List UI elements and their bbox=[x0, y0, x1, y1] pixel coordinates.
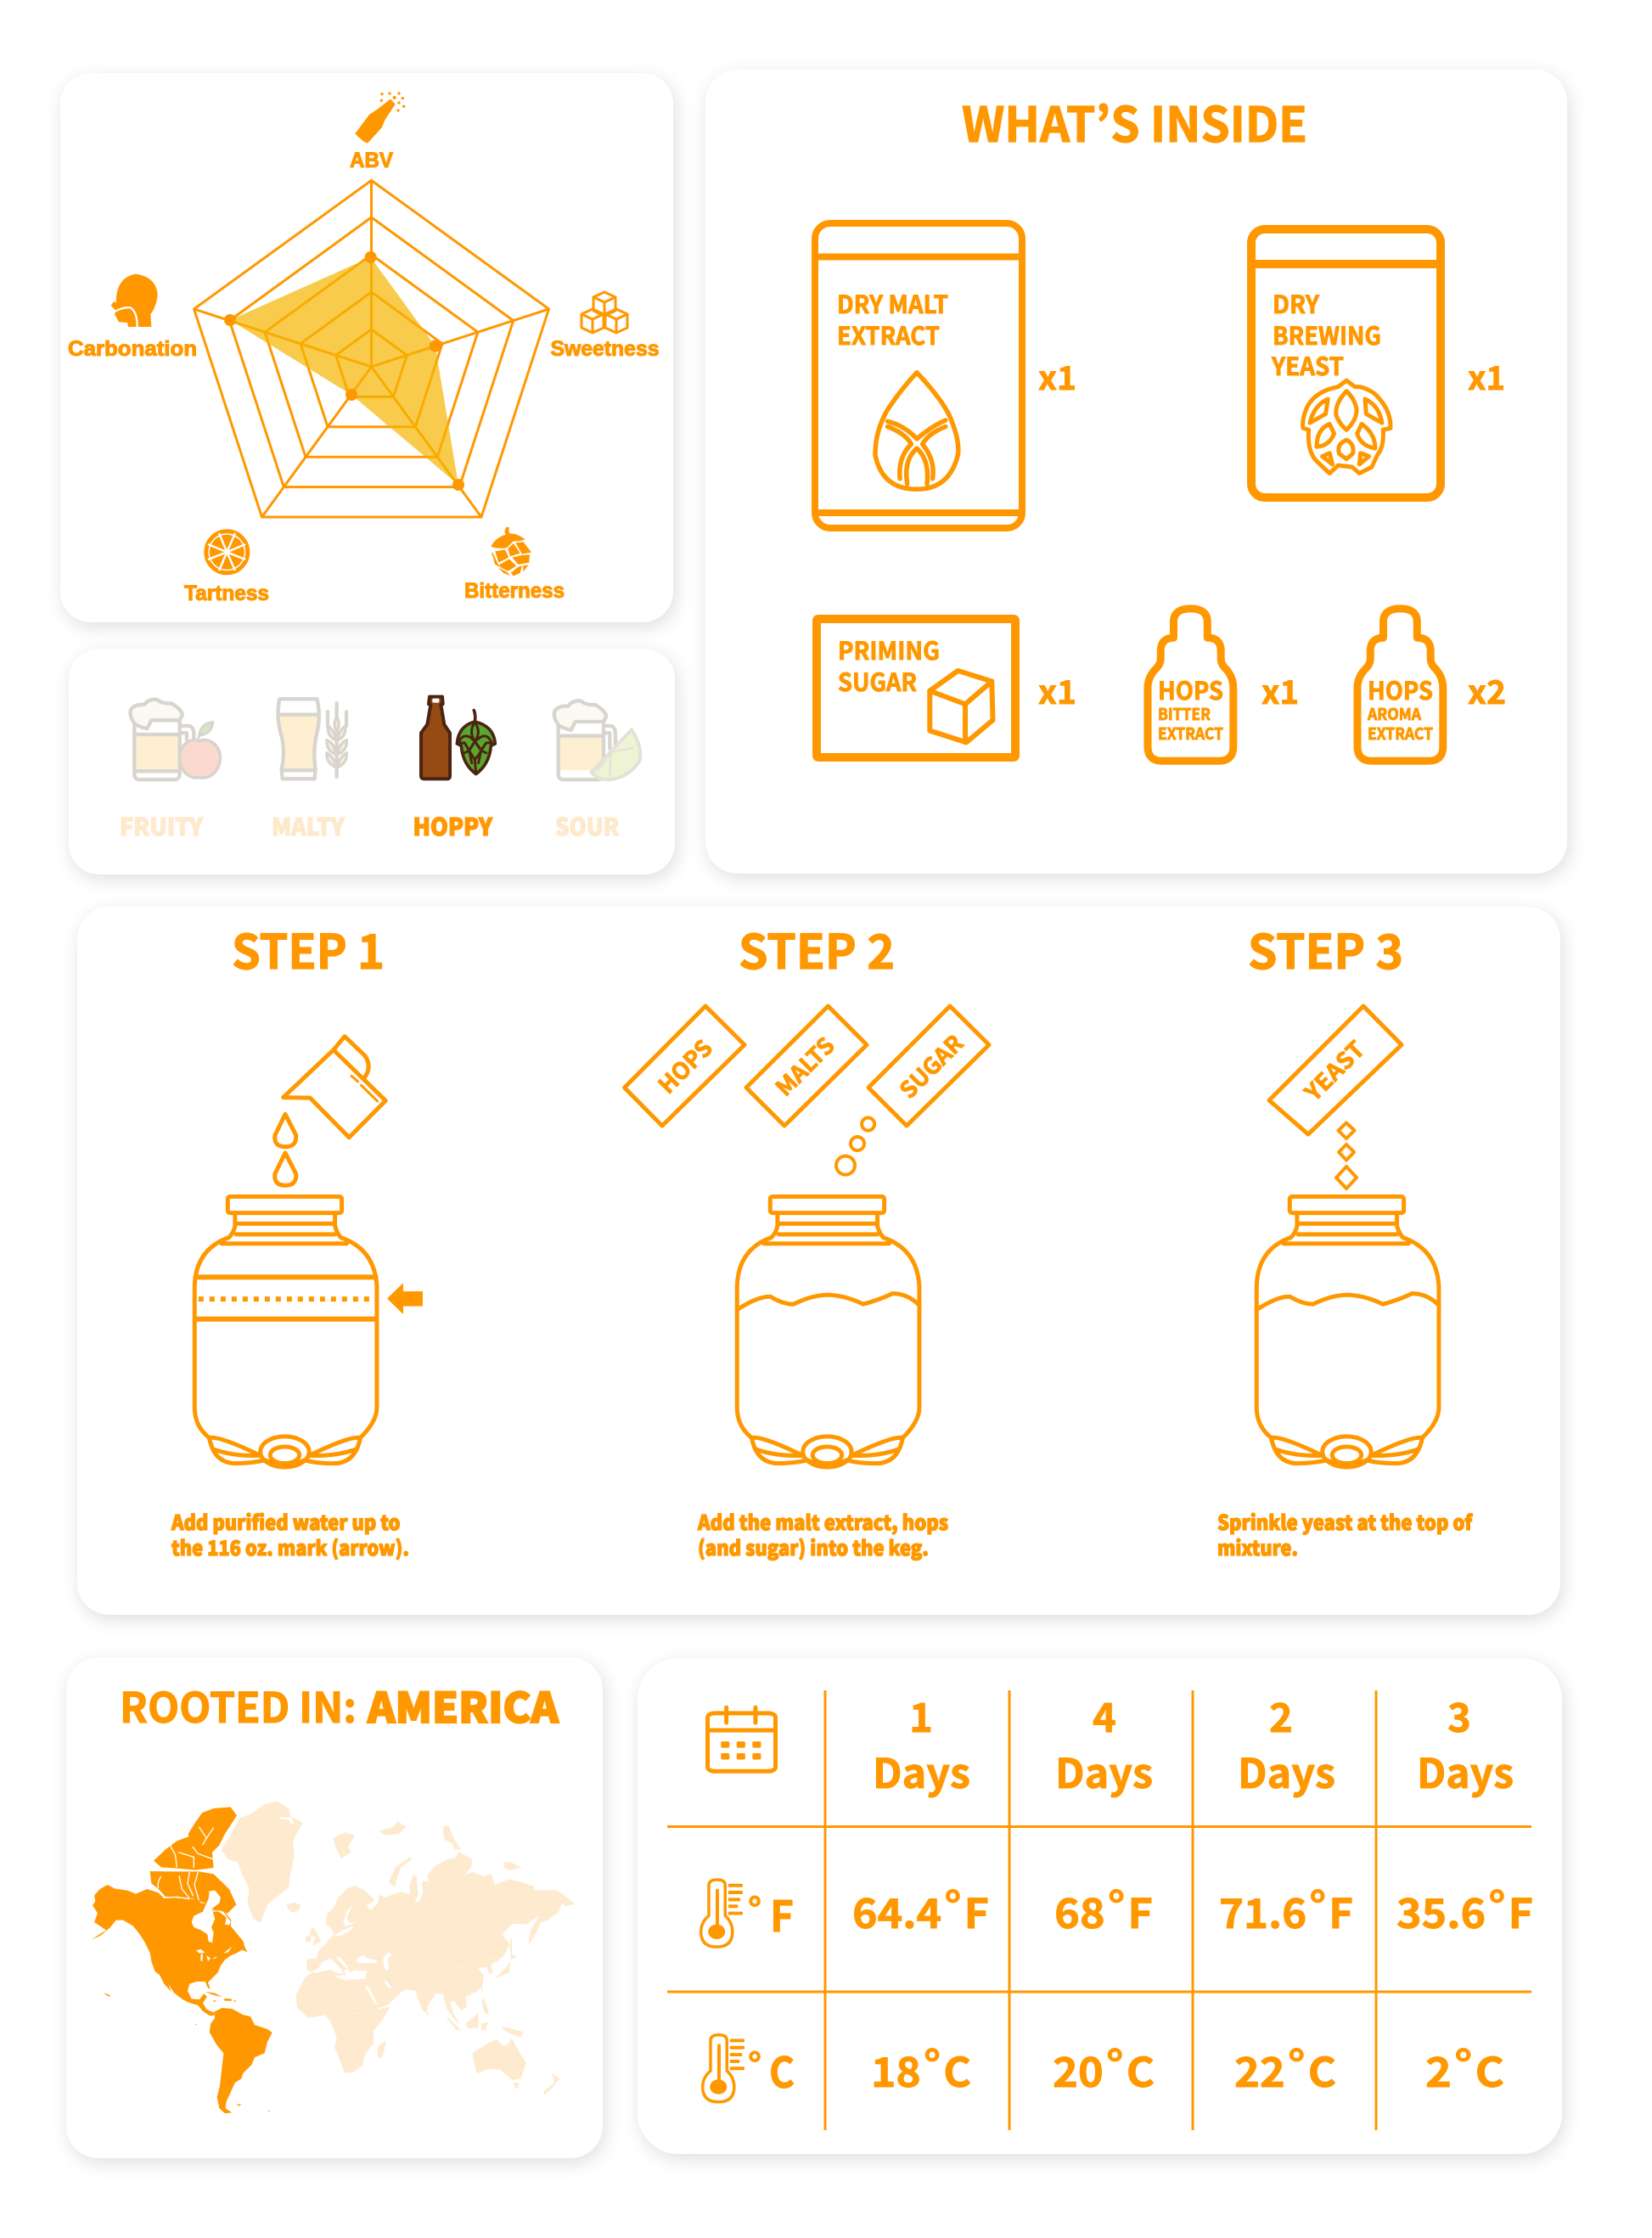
column 3 days: Days bbox=[1238, 1740, 1335, 1800]
icon: malty glass bbox=[278, 699, 346, 779]
label: Sweetness: Sweetness bbox=[550, 337, 659, 361]
panel: fermentation table bbox=[638, 1658, 1562, 2154]
icon: calendar bbox=[708, 1707, 776, 1771]
panel: what's inside bbox=[705, 70, 1567, 874]
bottle: hops bitter extract: BITTER bbox=[1158, 702, 1211, 725]
heading: step 1: STEP 1 bbox=[232, 914, 385, 983]
label: ABV: ABV bbox=[350, 149, 393, 172]
icon: hop cone bbox=[491, 527, 531, 576]
label: Bitterness: Bitterness bbox=[464, 579, 565, 603]
bottle: hops aroma extract: HOPS bbox=[1368, 672, 1433, 707]
bag: priming sugar: SUGAR bbox=[838, 663, 917, 699]
heading: step 2: STEP 2 bbox=[739, 914, 895, 983]
temp C column 2: 20 bbox=[1053, 2039, 1101, 2099]
keg: step 2 bbox=[737, 1196, 919, 1467]
temp F column 2: 68 bbox=[1054, 1881, 1103, 1940]
temp F column 1: F bbox=[964, 1881, 989, 1940]
row label: celsius bbox=[703, 2035, 795, 2102]
temp C column 1: 18 bbox=[871, 2039, 919, 2099]
heading: rooted in america: AMERICA bbox=[367, 1675, 559, 1735]
label: x1 sugar: x1 bbox=[1038, 666, 1076, 713]
column 2 days bbox=[1055, 1685, 1153, 1800]
keg: step 1 bbox=[194, 1196, 377, 1467]
panel: origin map bbox=[66, 1657, 603, 2158]
bag: dry malt extract: EXTRACT bbox=[837, 317, 940, 352]
label: HOPPY: HOPPY bbox=[413, 809, 493, 843]
icon: falling yeast bbox=[1336, 1122, 1357, 1189]
heading: rooted in america bbox=[120, 1675, 559, 1735]
label: Tartness: Tartness bbox=[184, 582, 269, 605]
icon: pitcher pouring bbox=[284, 1037, 385, 1138]
bag: dry brewing yeast: DRY bbox=[1273, 285, 1320, 321]
text: step 2 instructions: Add the malt extract, hops bbox=[697, 1506, 948, 1536]
temp C column 2: C bbox=[1127, 2039, 1155, 2099]
heading: step 3: STEP 3 bbox=[1248, 914, 1403, 983]
bottle: hops bitter extract: EXTRACT bbox=[1158, 722, 1223, 745]
temp F column 4: ° bbox=[1488, 1874, 1506, 1933]
icon: grain drop bbox=[875, 373, 958, 489]
row label: fahrenheit: ° bbox=[748, 1883, 761, 1932]
bottle: hops aroma extract: EXTRACT bbox=[1368, 722, 1433, 745]
text: step 3 instructions: mixture. bbox=[1217, 1532, 1298, 1561]
temp C column 2: ° bbox=[1106, 2033, 1124, 2092]
packet: yeast bbox=[1269, 1006, 1402, 1134]
icon: orange slice bbox=[206, 531, 248, 573]
icon: falling bubbles bbox=[836, 1117, 874, 1175]
text: step 3 instructions: Sprinkle yeast at the top of bbox=[1217, 1506, 1473, 1536]
row label: celsius: ° bbox=[748, 2038, 761, 2088]
arrow: water level bbox=[387, 1283, 423, 1314]
packet: hops bbox=[625, 1006, 745, 1126]
bottle: hops aroma extract bbox=[1357, 609, 1443, 761]
label: x2 aroma: x2 bbox=[1468, 666, 1506, 713]
temp F column 2: F bbox=[1127, 1881, 1153, 1940]
label: x1 dry malt: x1 bbox=[1038, 352, 1076, 399]
temp C column 1: ° bbox=[924, 2033, 941, 2092]
heading: rooted in america: ROOTED IN: bbox=[120, 1675, 357, 1735]
bag: dry brewing yeast: YEAST bbox=[1271, 347, 1344, 383]
label: MALTY: MALTY bbox=[272, 809, 346, 843]
radar chart bbox=[194, 180, 548, 517]
column 3 days bbox=[1238, 1685, 1335, 1800]
bag: priming sugar bbox=[817, 619, 1015, 757]
column 3 days: 2 bbox=[1269, 1685, 1293, 1744]
bottle: hops bitter extract: HOPS bbox=[1158, 672, 1223, 707]
temp F column 4: F bbox=[1509, 1881, 1533, 1940]
label: FRUITY: FRUITY bbox=[120, 809, 204, 843]
label: Carbonation: Carbonation bbox=[68, 337, 197, 361]
map: americas highlighted bbox=[92, 1802, 303, 2113]
icon: water drops bbox=[275, 1114, 296, 1185]
icon: sugar cube bbox=[930, 671, 993, 742]
text: step 3 instructions bbox=[1217, 1506, 1473, 1561]
temp F column 3: ° bbox=[1309, 1874, 1326, 1933]
temp F column 3: 71.6 bbox=[1219, 1881, 1305, 1940]
label: SOUR: SOUR bbox=[555, 809, 619, 843]
packet: hops: HOPS bbox=[649, 1031, 719, 1100]
icon: hoppy bottle and hop bbox=[421, 697, 495, 779]
row label: fahrenheit: F bbox=[770, 1883, 794, 1944]
temp F column 2: ° bbox=[1108, 1874, 1125, 1933]
text: step 2 instructions: (and sugar) into the keg. bbox=[698, 1532, 929, 1561]
bag: dry malt extract bbox=[815, 223, 1022, 528]
column 2 days: 4 bbox=[1093, 1685, 1116, 1744]
bottle: hops bitter extract bbox=[1148, 609, 1233, 761]
icon: bottle popping bbox=[355, 92, 405, 143]
row label: fahrenheit bbox=[701, 1880, 794, 1947]
packet: sugar bbox=[868, 1006, 989, 1126]
bag: dry malt extract: DRY MALT bbox=[837, 285, 948, 321]
temp C column 4: ° bbox=[1454, 2033, 1472, 2092]
icon: head with throat bbox=[111, 274, 158, 327]
icon: hop outline bbox=[1303, 380, 1391, 474]
packet: malts bbox=[746, 1006, 867, 1126]
text: step 1 instructions: the 116 oz. mark (arrow). bbox=[171, 1532, 409, 1561]
temp C column 3: ° bbox=[1288, 2033, 1306, 2092]
packet: malts: MALTS bbox=[767, 1028, 840, 1102]
column 4 days bbox=[1417, 1685, 1514, 1800]
panel: flavour profile bbox=[69, 649, 675, 874]
temp F column 3: F bbox=[1329, 1881, 1353, 1940]
panel: radar chart bbox=[60, 73, 673, 622]
row label: celsius: C bbox=[769, 2039, 795, 2100]
bag: dry brewing yeast bbox=[1251, 229, 1441, 498]
temp C column 4: 2 bbox=[1425, 2039, 1449, 2099]
column 4 days: 3 bbox=[1447, 1685, 1471, 1744]
temp C column 3: C bbox=[1308, 2039, 1336, 2099]
column 4 days: Days bbox=[1417, 1740, 1514, 1800]
keg: step 3 bbox=[1256, 1196, 1439, 1467]
column 1 days bbox=[873, 1685, 970, 1800]
temp C column 1: C bbox=[943, 2039, 971, 2099]
text: step 2 instructions bbox=[697, 1506, 948, 1561]
bottle: hops aroma extract: AROMA bbox=[1367, 702, 1422, 725]
icon: fruity mug bbox=[130, 700, 220, 779]
icon: sugar cubes bbox=[582, 292, 627, 333]
table grid bbox=[667, 1690, 1531, 2130]
text: step 1 instructions: Add purified water up to bbox=[171, 1506, 401, 1536]
packet: yeast: YEAST bbox=[1295, 1032, 1371, 1108]
column 1 days: Days bbox=[873, 1740, 970, 1800]
text: step 1 instructions bbox=[171, 1506, 409, 1561]
bag: dry brewing yeast: BREWING bbox=[1273, 317, 1381, 352]
column 2 days: Days bbox=[1055, 1740, 1153, 1800]
icon: sour mug and lime bbox=[554, 700, 640, 779]
map: rest of world bbox=[286, 1821, 575, 2095]
temp F column 1: ° bbox=[944, 1874, 962, 1933]
label: x1 bitter: x1 bbox=[1261, 666, 1299, 713]
column 1 days: 1 bbox=[909, 1685, 933, 1744]
temp F column 4: 35.6 bbox=[1396, 1881, 1482, 1940]
temp C column 3: 22 bbox=[1234, 2039, 1283, 2099]
temp C column 4: C bbox=[1475, 2039, 1504, 2099]
label: x1 yeast: x1 bbox=[1468, 352, 1505, 399]
bag: priming sugar: PRIMING bbox=[838, 632, 940, 667]
packet: sugar: SUGAR bbox=[891, 1026, 969, 1105]
heading: what's inside: WHAT’S INSIDE bbox=[962, 87, 1307, 156]
temp F column 1: 64.4 bbox=[852, 1881, 938, 1940]
panel: brewing steps bbox=[77, 907, 1560, 1615]
